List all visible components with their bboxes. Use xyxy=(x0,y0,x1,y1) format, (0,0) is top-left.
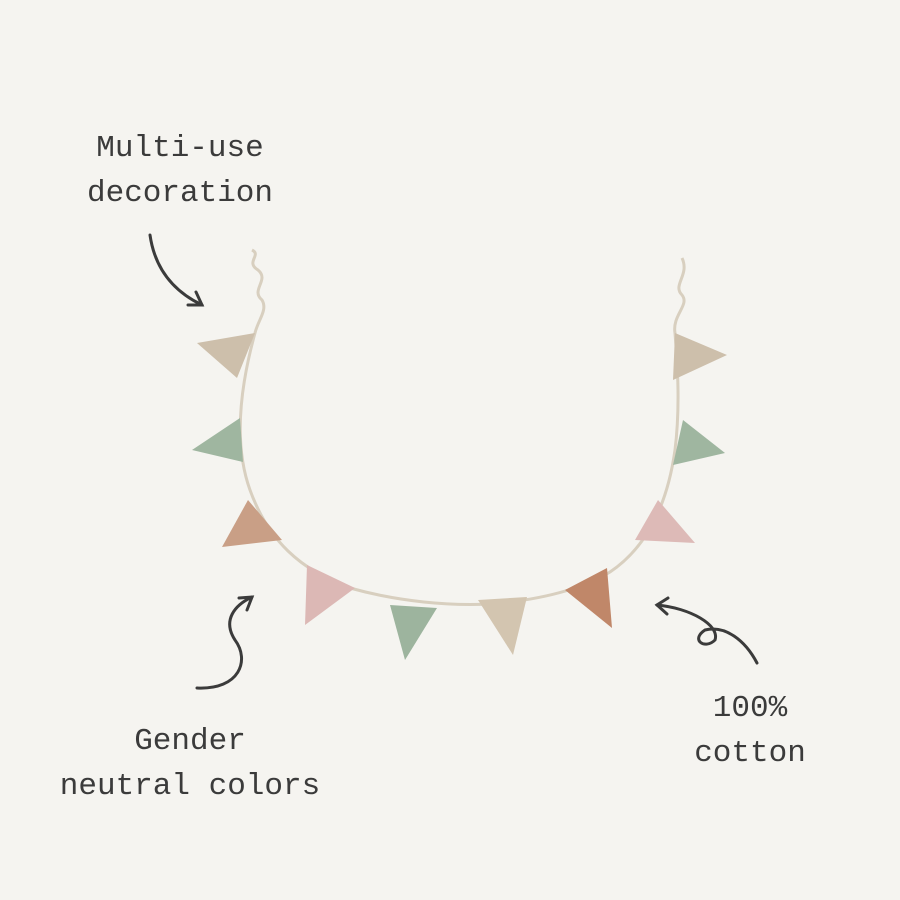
label: multi-use decoration xyxy=(87,131,273,211)
label: gender neutral colors xyxy=(60,724,320,804)
arrow: to top left xyxy=(150,235,202,305)
string xyxy=(240,250,684,604)
label: gender neutral colors: neutral colors xyxy=(60,769,320,804)
arrow: to bottom left xyxy=(197,597,252,688)
label: multi-use decoration: Multi-use xyxy=(96,131,264,166)
label: gender neutral colors: Gender xyxy=(134,724,246,759)
label: multi-use decoration: decoration xyxy=(87,176,273,211)
label: 100% cotton: 100% xyxy=(713,691,787,726)
label: 100% cotton: cotton xyxy=(694,736,806,771)
label: 100% cotton xyxy=(694,691,806,771)
arrow: to bottom right xyxy=(657,598,757,663)
flags xyxy=(197,333,255,378)
